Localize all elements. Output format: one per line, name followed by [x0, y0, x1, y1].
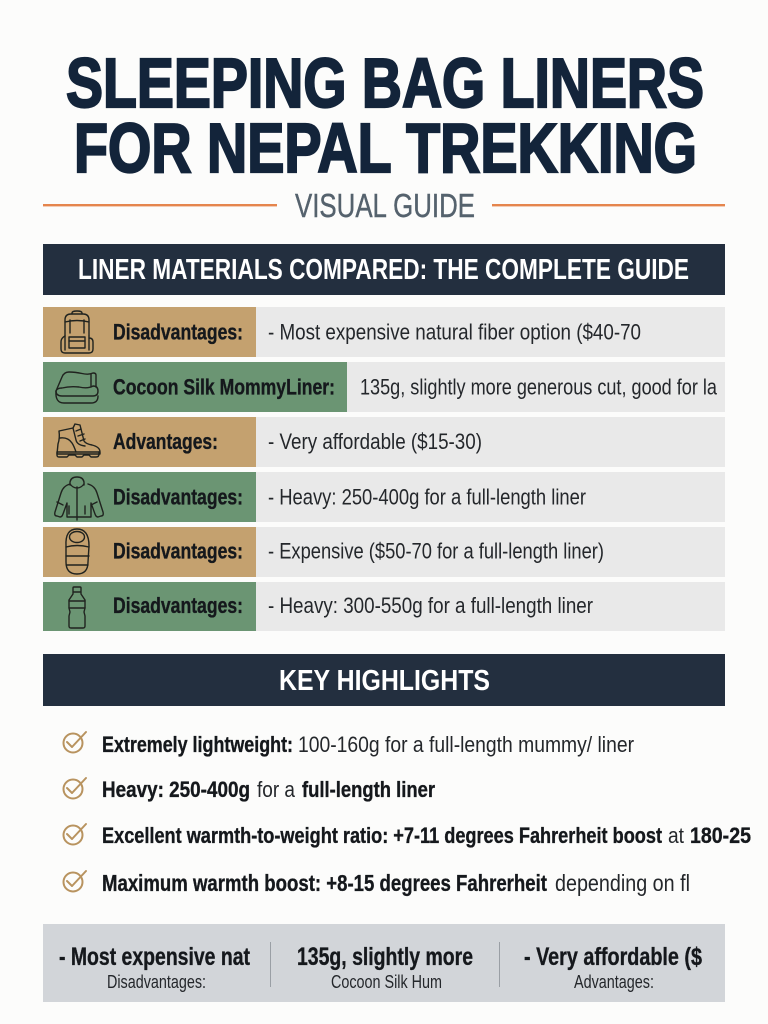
subtitle: visual guide: VISUAL GUIDE [295, 187, 475, 224]
icon: folded liner [56, 372, 98, 403]
stat 1 [59, 943, 251, 992]
comparison row 4: - Heavy: 250-400g for a full-length liner [268, 484, 586, 510]
icon: check [64, 732, 86, 752]
comparison row 1: Disadvantages: [113, 320, 243, 344]
stat 3 [524, 943, 702, 992]
title [66, 44, 704, 187]
stat 2 [297, 943, 473, 992]
stat 3: - Very affordable ($ [524, 943, 702, 971]
comparison row 2: Cocoon Silk MommyLiner: [113, 374, 335, 400]
highlight 3: at [668, 823, 684, 848]
comparison row 3 [43, 417, 725, 467]
icon: check [64, 871, 86, 892]
highlight 3: 180-25 [690, 823, 751, 848]
highlight 1: 100-160g for a full-length mummy/ liner [298, 732, 634, 757]
icon: sleeping bag [66, 529, 89, 574]
summary strip [43, 924, 725, 1002]
comparison row 2 [43, 362, 725, 412]
icon: water bottle [69, 587, 85, 628]
highlight 2 [64, 777, 435, 802]
highlight 3: Excellent warmth-to-weight ratio: +7-11 degrees Fahrerheit boost [102, 823, 663, 848]
stat 1: - Most expensive nat [59, 943, 251, 971]
highlight 2: for a [257, 777, 296, 802]
stat 2: Cocoon Silk Hum [331, 972, 442, 992]
stat 1: Disadvantages: [107, 972, 206, 992]
highlight 2: full-length liner [302, 777, 435, 802]
stat 3: Advantages: [574, 972, 654, 992]
section heading: key highlights: KEY HIGHLIGHTS [279, 665, 490, 697]
comparison row 6: Disadvantages: [113, 593, 243, 618]
comparison row 5: - Expensive ($50-70 for a full-length liner) [268, 538, 604, 564]
comparison row 3: Advantages: [113, 429, 218, 454]
icon: check [64, 778, 86, 798]
icon: jacket [55, 477, 103, 520]
icon: hiking boot [57, 424, 100, 457]
section heading: liner materials [43, 244, 725, 295]
comparison row 5 [43, 527, 725, 577]
comparison row 5: Disadvantages: [113, 538, 243, 564]
section heading: key highlights [43, 654, 725, 706]
comparison row 1 [43, 307, 725, 357]
highlight 1 [64, 732, 634, 757]
highlight 4: Maximum warmth boost: +8-15 degrees Fahrerheit [102, 870, 547, 896]
comparison row 1: - Most expensive natural fiber option ($40-70 [268, 320, 641, 344]
comparison row 6: - Heavy: 300-550g for a full-length liner [268, 593, 593, 618]
comparison row 6 [43, 582, 725, 631]
comparison row 3: - Very affordable ($15-30) [268, 429, 482, 454]
icon: check [64, 824, 86, 844]
highlight 4: depending on fl [555, 870, 690, 896]
comparison row 4: Disadvantages: [113, 484, 243, 510]
highlight 1: Extremely lightweight: [102, 732, 293, 757]
icon: backpack [61, 311, 93, 353]
stat 2: 135g, slightly more [297, 943, 473, 971]
comparison row 4 [43, 472, 725, 522]
highlight 2: Heavy: 250-400g [102, 777, 250, 802]
